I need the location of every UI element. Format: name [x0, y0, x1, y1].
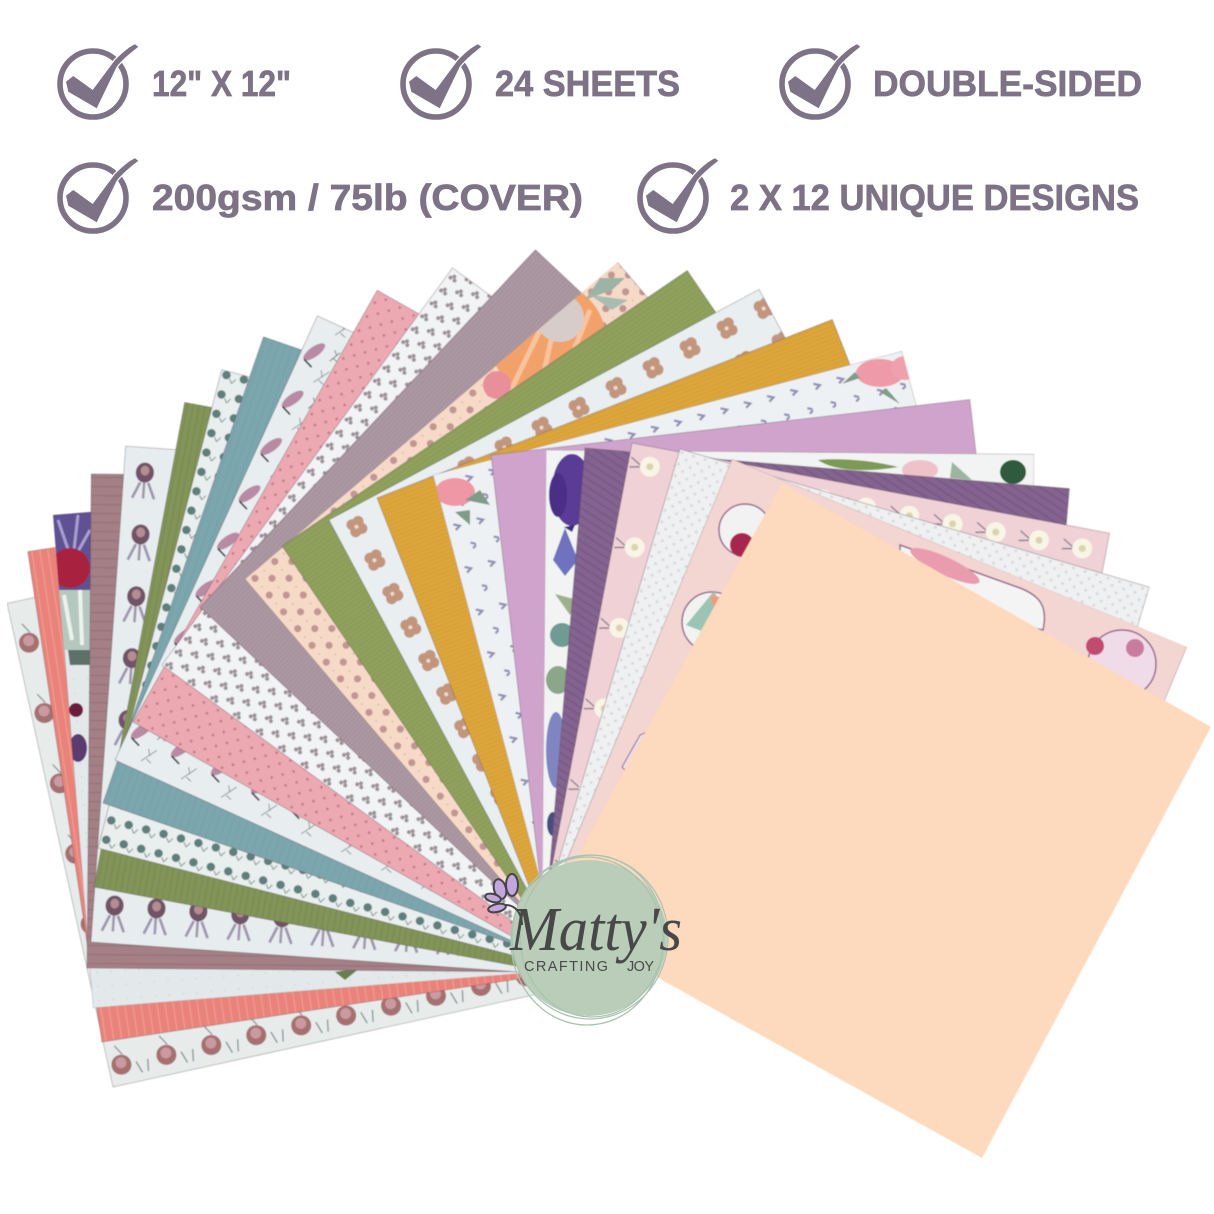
- sheet: olive green: [282, 271, 966, 955]
- feature: paper weight: [60, 158, 583, 231]
- sheet: sage green stripes: [94, 402, 671, 978]
- sheet: purple textured: [544, 448, 1069, 982]
- sheet: teal blob dots: [98, 370, 701, 972]
- feature: unique designs: 2 X 12 UNIQUE DESIGNS: [730, 177, 1139, 218]
- feature: double-sided: DOUBLE-SIDED: [873, 63, 1142, 104]
- sheet: white brown flowers: [329, 289, 993, 956]
- feature: 12 x 12: [60, 44, 291, 117]
- feature: double-sided: [782, 44, 1142, 117]
- logo: Matty's Crafting Joy: [484, 855, 682, 1025]
- sheet: white with tulip and botanicals: [542, 450, 1034, 876]
- sheet: peach with sunflower: [245, 262, 648, 901]
- sheet: purple flower: [52, 511, 520, 1008]
- logo script name: Matty's: [509, 896, 682, 964]
- feature: 12 x 12: 12" X 12": [152, 63, 291, 104]
- sheet: teal: [103, 337, 732, 964]
- feature: 24 sheets: 24 SHEETS: [495, 63, 680, 104]
- sheet: pink daisies: [540, 443, 1110, 1020]
- sheet: pink polka dot: [133, 290, 808, 966]
- sheet: coral stripes: [28, 478, 591, 1042]
- logo badge circle: [511, 860, 667, 1016]
- sheet: white floral: [7, 498, 597, 1087]
- logo rings: [511, 855, 668, 1025]
- sheet: mauve grey: [200, 250, 896, 946]
- logo subtitle right: JOY: [627, 959, 654, 975]
- sheet: white birds and branches: [115, 316, 768, 965]
- sheet: lilac: [491, 400, 1027, 947]
- sheet: mauve brick: [87, 474, 586, 972]
- feature: 24 sheets: [403, 44, 680, 117]
- fan of 24 paper sheets: [7, 250, 1211, 1158]
- sheet: white grey hearts: [162, 268, 852, 957]
- logo flower icon: [484, 874, 522, 925]
- sheet: pink with floral circles: [564, 458, 1188, 864]
- sheet: solid peach on top: [545, 483, 1211, 1158]
- feature: paper weight: 200gsm / 75lb (COVER): [152, 177, 583, 218]
- feature list: [60, 44, 1142, 231]
- logo subtitle left: CRAFTING: [524, 959, 608, 975]
- sheet: white roses: [91, 446, 619, 977]
- sheet: white butterflies with pink flowers: [432, 350, 917, 878]
- sheet: mustard: [377, 320, 1013, 959]
- feature: unique designs: [640, 158, 1139, 231]
- sheet: white polka dot: [540, 449, 1149, 1062]
